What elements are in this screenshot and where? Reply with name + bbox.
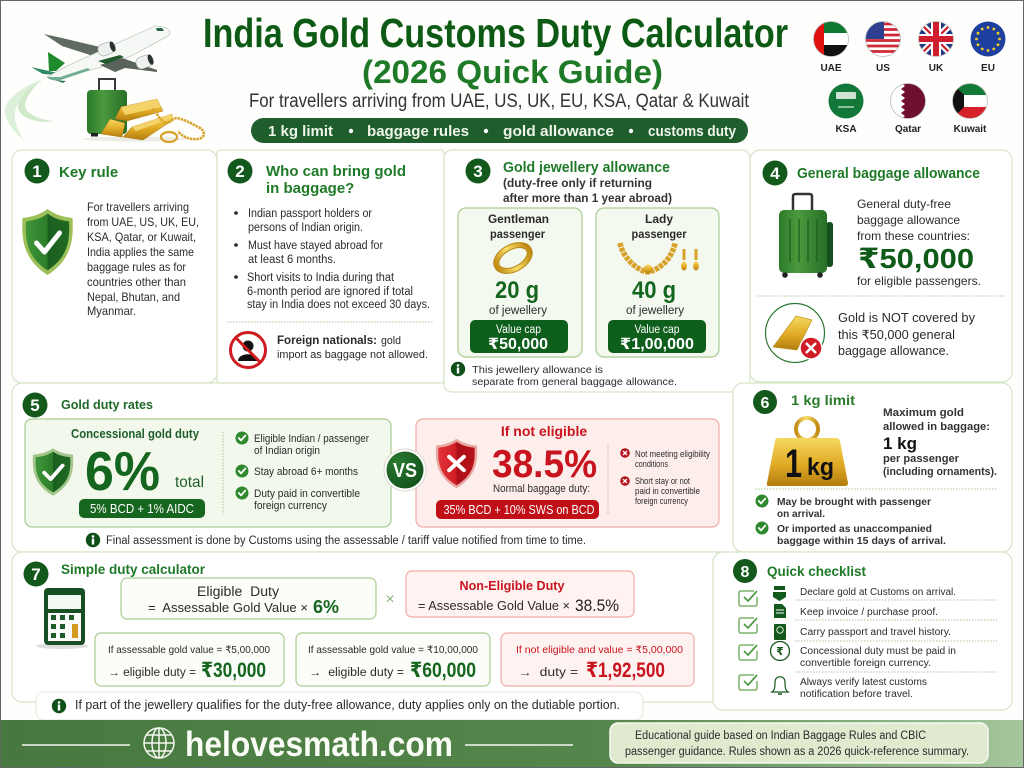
gold exclusion text: Gold is NOT covered by	[838, 311, 976, 325]
topics pill	[251, 118, 748, 143]
concessional duty box	[25, 419, 391, 527]
flag: KSA: KSA	[835, 124, 857, 135]
baggage allowance text	[857, 197, 981, 288]
eligibility conditions: Eligible Indian / passenger	[254, 433, 369, 445]
card: gentleman passenger: Gentleman	[488, 212, 549, 226]
comparison symbol: ×	[385, 591, 395, 608]
panel 7: simple duty calculator	[12, 552, 724, 702]
heading 2	[228, 158, 406, 197]
heading 3: after more than 1 year abroad)	[503, 191, 672, 205]
concessional duty box: 6%	[85, 440, 160, 502]
key rule text: baggage rules as for	[87, 260, 186, 274]
icon: calculator	[36, 588, 88, 649]
source note	[610, 723, 988, 763]
not eligible box: Normal baggage duty:	[493, 483, 590, 495]
checkbox column	[739, 591, 757, 690]
heading 7: Simple duty calculator	[61, 561, 206, 577]
baggage allowance text: for eligible passengers.	[857, 274, 981, 288]
eligibility conditions: of Indian origin	[254, 445, 320, 457]
icon: rupee coin	[770, 642, 790, 660]
header	[5, 10, 1006, 143]
flag: Qatar: Qatar	[895, 124, 921, 135]
heading 8: Quick checklist	[767, 563, 866, 579]
flag: UK: UK	[929, 63, 944, 74]
1 kg limit text: allowed in baggage:	[883, 421, 990, 433]
illustration: plane with trail	[5, 26, 170, 140]
1 kg limit text: 1 kg	[883, 434, 917, 453]
icon: shield check	[22, 209, 73, 275]
concessional duty box: total	[175, 474, 204, 491]
icon: gold ring	[492, 240, 534, 276]
card: gentleman passenger: of jewellery	[489, 305, 547, 317]
checklist text: notification before travel.	[800, 689, 913, 700]
example: 10 lakh eligible: ₹60,000	[410, 659, 476, 682]
versus badge	[384, 449, 426, 491]
heading 1	[24, 158, 118, 184]
heading 2: 2	[235, 162, 245, 181]
card: lady passenger: ₹1,00,000	[620, 336, 694, 353]
card: gentleman passenger: passenger	[490, 227, 545, 241]
heading 3	[466, 158, 672, 205]
icon: rupee coin: ₹	[776, 646, 784, 658]
example: not eligible: → duty =	[518, 667, 578, 679]
1 kg conditions	[756, 494, 946, 547]
heading 4: General baggage allowance	[797, 165, 980, 182]
1 kg conditions: Or imported as unaccompanied	[777, 523, 932, 535]
not eligible box: 38.5%	[492, 443, 597, 486]
jewellery duty note	[36, 692, 643, 720]
eligibility conditions: Stay abroad 6+ months	[254, 466, 359, 478]
icon: globe	[144, 728, 174, 758]
icon: gold bar excluded	[766, 304, 824, 362]
heading 6: 6	[761, 395, 770, 412]
1 kg conditions: on arrival.	[777, 508, 825, 520]
ineligibility conditions	[620, 448, 710, 506]
formula: eligible duty: 6%	[313, 597, 339, 617]
not eligible box: 35% BCD + 10% SWS on BCD	[444, 503, 594, 517]
panel 1: key rule	[12, 150, 217, 383]
heading 3: 3	[473, 162, 483, 181]
eligibility bullets: Short visits to India during that	[247, 272, 395, 284]
foreign nationals note: import as baggage not allowed.	[277, 349, 428, 361]
flag: EU: EU	[981, 63, 995, 74]
flag: Kuwait	[952, 83, 988, 135]
icon: bell	[772, 677, 788, 694]
card: lady passenger: of jewellery	[626, 305, 684, 317]
subtitle: (2026 Quick Guide)	[362, 54, 663, 90]
baggage allowance text: baggage allowance	[857, 213, 960, 227]
heading 8	[733, 559, 866, 583]
icon: invoice document	[774, 604, 786, 618]
flag: Kuwait: Kuwait	[954, 124, 987, 135]
assessment note: Final assessment is done by Customs using the assessable / tariff value notified from time to time.	[106, 535, 586, 547]
flag: Qatar	[890, 83, 926, 135]
heading 3: Gold jewellery allowance	[503, 160, 670, 176]
key rule text: Myanmar.	[87, 304, 136, 318]
flag: US	[865, 21, 901, 74]
formula: non-eligible duty: = Assessable Gold Value ×	[418, 599, 570, 613]
baggage allowance text: General duty-free	[857, 197, 951, 211]
flag: KSA	[828, 84, 864, 135]
panel 2: who can bring gold	[217, 150, 444, 383]
icon: passport	[774, 624, 786, 640]
panel 3: jewellery allowance	[444, 150, 750, 392]
heading 5: Gold duty rates	[61, 397, 153, 412]
key rule text: KSA, Qatar, or Kuwait,	[87, 230, 196, 244]
topics pill: gold allowance	[503, 123, 614, 140]
flag: US: US	[876, 63, 890, 74]
baggage allowance text: from these countries:	[857, 229, 970, 243]
example: 5 lakh eligible: If assessable gold value = ₹5,00,000	[108, 645, 270, 656]
heading 1: 1	[32, 162, 42, 181]
key rule text: from UAE, US, UK, EU,	[87, 215, 199, 229]
jewellery note	[451, 362, 677, 388]
panel 6: 1 kg limit	[733, 383, 1012, 552]
checklist text: Always verify latest customs	[800, 677, 927, 688]
ineligibility conditions: foreign currency	[635, 496, 688, 506]
eligibility bullets: Indian passport holders or	[248, 208, 372, 220]
1 kg limit text: Maximum gold	[883, 407, 964, 419]
versus badge: VS	[393, 460, 417, 482]
1 kg conditions: baggage within 15 days of arrival.	[777, 535, 946, 547]
topics pill: customs duty	[648, 123, 737, 140]
card: gentleman passenger	[458, 208, 582, 357]
flag: EU	[970, 22, 1006, 74]
icon: 1 kg gold weight: 1	[785, 442, 802, 486]
example: 10 lakh eligible: → eligible duty =	[309, 667, 404, 679]
illustration: suitcase and gold bars	[83, 79, 204, 142]
checklist text: convertible foreign currency.	[800, 658, 931, 669]
heading 2: Who can bring gold	[266, 163, 406, 180]
checklist text: Carry passport and travel history.	[800, 627, 951, 638]
flag: UK	[918, 21, 954, 74]
footer	[1, 720, 1023, 767]
example: not eligible	[501, 633, 694, 686]
gold exclusion text	[838, 311, 976, 358]
jewellery note: This jewellery allowance is	[472, 364, 603, 376]
key rule text: Nepal, Bhutan, and	[87, 290, 180, 304]
heading 7	[24, 561, 206, 586]
heading 7: 7	[31, 565, 41, 584]
key rule text: India applies the same	[87, 245, 194, 259]
example: 10 lakh eligible: If assessable gold value = ₹10,00,000	[308, 645, 478, 656]
ineligibility conditions: paid in convertible	[635, 486, 700, 496]
foreign nationals note: gold	[381, 335, 401, 347]
formula: non-eligible duty: Non-Eligible Duty	[460, 578, 565, 593]
icon: green shield	[33, 448, 73, 496]
icon: gold necklace and earrings	[620, 243, 699, 274]
icon: 1 kg gold weight	[767, 418, 848, 486]
icon: green suitcase	[779, 194, 833, 278]
baggage allowance text: ₹50,000	[858, 243, 974, 274]
icon: 1 kg gold weight: kg	[807, 454, 834, 481]
example: 5 lakh eligible	[95, 633, 284, 686]
card: gentleman passenger: Value cap	[496, 324, 541, 336]
icon: red shield	[436, 439, 477, 488]
ineligibility conditions: conditions	[635, 459, 668, 469]
card: gentleman passenger: 20 g	[495, 277, 539, 304]
tagline: For travellers arriving from UAE, US, UK, EU, KSA, Qatar & Kuwait	[249, 91, 750, 112]
key rule text	[87, 200, 199, 318]
foreign nationals note	[277, 333, 428, 361]
not eligible box	[416, 419, 719, 527]
topics pill: 1 kg limit	[268, 123, 333, 140]
card: lady passenger: 40 g	[632, 277, 676, 304]
eligibility bullets: Must have stayed abroad for	[248, 240, 383, 252]
source note: passenger guidance. Rules shown as a 2026 quick-reference summary.	[625, 746, 969, 758]
example: 5 lakh eligible: → eligible duty =	[108, 667, 196, 679]
heading 6: 1 kg limit	[791, 392, 855, 408]
1 kg limit text: per passenger	[883, 453, 960, 465]
key rule text: countries other than	[87, 275, 186, 289]
heading 4	[762, 160, 980, 186]
jewellery note: separate from general baggage allowance.	[472, 376, 677, 388]
checklist text: Keep invoice / purchase proof.	[800, 607, 938, 618]
icon: customs badge	[773, 586, 786, 601]
website name: helovesmath.com	[185, 725, 453, 764]
heading 2: in baggage?	[266, 180, 354, 197]
key rule text: For travellers arriving	[87, 200, 189, 214]
concessional duty box: 5% BCD + 1% AIDC	[90, 502, 194, 516]
source note: Educational guide based on Indian Baggage Rules and CBIC	[635, 730, 926, 742]
heading 3: (duty-free only if returning	[503, 176, 652, 190]
example: not eligible: ₹1,92,500	[586, 659, 665, 682]
panel 5: gold duty rates	[12, 383, 752, 552]
checklist text	[800, 587, 956, 700]
ineligibility conditions: Not meeting eligibility	[635, 449, 710, 459]
gold exclusion text: this ₹50,000 general	[838, 328, 955, 342]
eligibility conditions: Duty paid in convertible	[254, 488, 360, 500]
example: 5 lakh eligible: ₹30,000	[201, 659, 266, 682]
checklist text: Concessional duty must be paid in	[800, 646, 956, 657]
example: 10 lakh eligible	[296, 633, 490, 686]
panel 8: quick checklist	[713, 552, 1012, 710]
eligibility bullets: stay in India does not exceed 30 days.	[247, 299, 430, 311]
1 kg conditions: May be brought with passenger	[777, 496, 931, 508]
eligibility conditions	[236, 432, 369, 512]
flag: UAE	[813, 21, 849, 74]
formula: non-eligible duty: 38.5%	[575, 597, 619, 615]
title: India Gold Customs Duty Calculator	[203, 10, 788, 56]
heading 8: 8	[741, 564, 750, 581]
card: lady passenger	[596, 208, 719, 357]
eligibility conditions: foreign currency	[254, 500, 328, 512]
1 kg limit text: (including ornaments).	[883, 466, 997, 478]
card: gentleman passenger: ₹50,000	[488, 336, 548, 353]
concessional duty box: Concessional gold duty	[71, 426, 200, 441]
flag: UAE: UAE	[820, 63, 842, 74]
formula: non-eligible duty	[406, 571, 634, 617]
checklist text: Declare gold at Customs on arrival.	[800, 587, 956, 598]
gold exclusion text: baggage allowance.	[838, 344, 949, 358]
formula: eligible duty: Eligible Duty	[197, 584, 279, 599]
card: lady passenger: Value cap	[634, 324, 680, 336]
formula: eligible duty: = Assessable Gold Value ×	[148, 601, 308, 615]
heading 5: 5	[30, 396, 40, 415]
heading 4: 4	[770, 164, 780, 183]
card: lady passenger: Lady	[645, 212, 673, 226]
flags	[813, 21, 1006, 135]
heading 6	[753, 390, 855, 414]
icon: no foreign nationals	[230, 332, 266, 368]
eligibility bullets: persons of Indian origin.	[248, 222, 363, 234]
eligibility bullets	[234, 208, 430, 311]
foreign nationals note: Foreign nationals:	[277, 333, 377, 347]
heading 5	[22, 392, 153, 418]
eligibility bullets: at least 6 months.	[248, 254, 336, 266]
formula: eligible duty	[121, 578, 376, 619]
heading 1: Key rule	[59, 164, 118, 181]
jewellery duty note: If part of the jewellery qualifies for the duty-free allowance, duty applies only on the dutiable portion.	[75, 698, 620, 712]
card: lady passenger: passenger	[632, 227, 687, 241]
panel 4: general baggage allowance	[750, 150, 1012, 382]
not eligible box: If not eligible	[501, 423, 587, 439]
1 kg limit text	[883, 407, 997, 478]
eligibility bullets: 6-month period are ignored if total	[247, 286, 413, 298]
example: not eligible: If not eligible and value = ₹5,00,000	[516, 645, 683, 656]
topics pill: baggage rules	[367, 123, 469, 140]
ineligibility conditions: Short stay or not	[635, 476, 690, 486]
